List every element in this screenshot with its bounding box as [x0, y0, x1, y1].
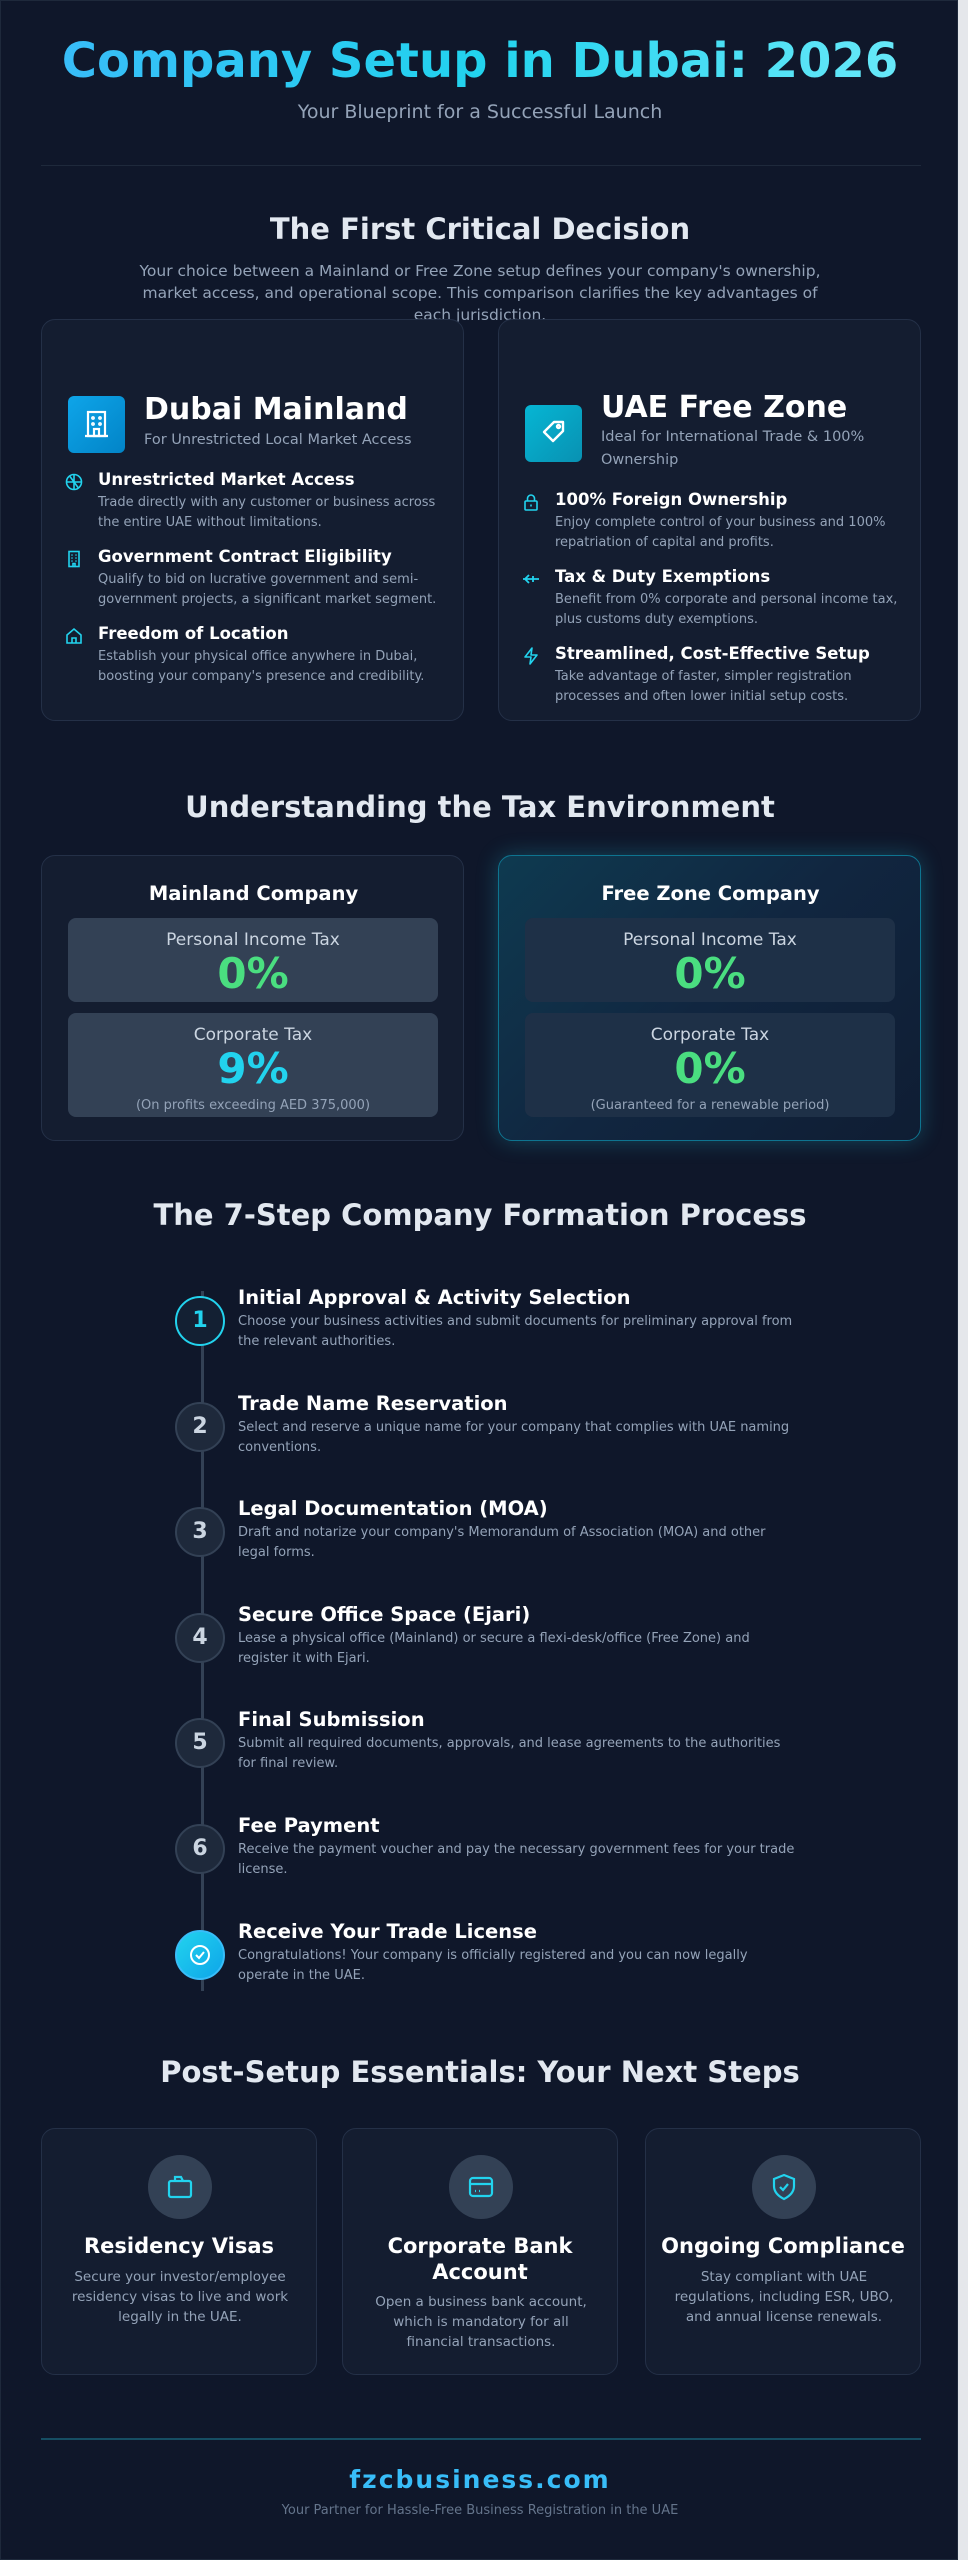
card: bank account: Account — [432, 2260, 528, 2284]
step 2: Select and reserve a unique name for your company that complies with UAE naming conventions. — [238, 1420, 789, 1455]
step 2 — [175, 1392, 789, 1455]
heading: post-setup: Post-Setup Essentials: Your Next Steps — [160, 2055, 800, 2089]
feature: ownership: 100% Foreign Ownership — [555, 490, 787, 509]
heading: UAE Free Zone — [601, 390, 847, 425]
step 6 — [175, 1814, 794, 1877]
card: compliance — [645, 2128, 921, 2375]
feature: government contracts: Government Contract Eligibility — [98, 547, 392, 566]
feature: freedom of location: Establish your physical office anywhere in Dubai, boosting your company's presence and credibility. — [98, 649, 424, 684]
icon: tag — [525, 405, 582, 462]
icon: card — [449, 2155, 513, 2219]
feature: ownership — [524, 490, 885, 550]
card: residency visas — [41, 2128, 317, 2375]
step 4: 4 — [192, 1625, 208, 1650]
corporate tax box: 0% — [674, 1044, 746, 1093]
step 2: Trade Name Reservation — [238, 1392, 508, 1415]
corporate tax box: Corporate Tax — [194, 1025, 312, 1045]
panel: Dubai Mainland — [41, 319, 464, 721]
feature: tax exemptions — [523, 567, 897, 627]
feature: market access: Unrestricted Market Access — [98, 470, 355, 489]
corporate tax box: (Guaranteed for a renewable period) — [591, 1098, 829, 1113]
panel: free zone tax — [498, 855, 921, 1141]
card: compliance: Ongoing Compliance — [661, 2234, 905, 2258]
step 1 — [175, 1286, 792, 1349]
feature: government contracts: Qualify to bid on lucrative government and semi-government projects, a significant market segment. — [98, 572, 436, 607]
subheading: For Unrestricted Local Market Access — [144, 432, 412, 448]
feature: tax exemptions: Tax & Duty Exemptions — [555, 567, 770, 586]
feature: government contracts — [68, 547, 436, 607]
icon: building — [68, 396, 125, 453]
step 7 — [175, 1920, 748, 1983]
card: residency visas: Secure your investor/employee residency visas to live and work legally in the UAE. — [72, 2269, 288, 2325]
card title: Free Zone Company — [601, 882, 820, 905]
step 1: Choose your business activities and submit documents for preliminary approval from the relevant authorities. — [238, 1314, 792, 1349]
step 5 — [175, 1708, 780, 1771]
personal income tax box: Personal Income Tax — [623, 930, 797, 950]
step 1: 1 — [192, 1308, 208, 1333]
feature: freedom of location: Freedom of Location — [98, 624, 288, 643]
card: bank account: Open a business bank account, which is mandatory for all financial transactions. — [375, 2294, 587, 2350]
heading: first critical decision: The First Critical Decision — [270, 212, 690, 246]
panel: mainland tax — [41, 855, 464, 1141]
step 3: Legal Documentation (MOA) — [238, 1497, 548, 1520]
footer brand: fzcbusiness.com — [349, 2465, 611, 2494]
panel: UAE Free Zone — [498, 319, 921, 721]
step 4: Secure Office Space (Ejari) — [238, 1603, 530, 1626]
feature: tax exemptions: Benefit from 0% corporate and personal income tax, plus customs duty exemptions. — [555, 592, 897, 627]
step 3: Draft and notarize your company's Memorandum of Association (MOA) and other legal forms. — [238, 1525, 766, 1560]
feature: freedom of location — [66, 624, 424, 684]
step 7: Receive Your Trade License — [238, 1920, 537, 1943]
step 7: Congratulations! Your company is officially registered and you can now legally operate in the UAE. — [238, 1948, 748, 1983]
step 5: Submit all required documents, approvals, and lease agreements to the authorities for final review. — [238, 1736, 780, 1771]
feature: ownership: Enjoy complete control of your business and 100% repatriation of capital and profits. — [555, 515, 885, 550]
step 4 — [175, 1603, 750, 1666]
step 1: Initial Approval & Activity Selection — [238, 1286, 631, 1309]
card: bank account — [342, 2128, 618, 2375]
feature: streamlined setup — [524, 644, 870, 704]
step 5: Final Submission — [238, 1708, 425, 1731]
footer tagline: Your Partner for Hassle-Free Business Registration in the UAE — [282, 2503, 678, 2518]
feature: streamlined setup: Streamlined, Cost-Effective Setup — [555, 644, 870, 663]
personal income tax box: 0% — [217, 949, 289, 998]
card: residency visas: Residency Visas — [84, 2234, 274, 2258]
feature: streamlined setup: Take advantage of faster, simpler registration processes and often lower initial setup costs. — [555, 669, 852, 704]
step 3: 3 — [192, 1519, 208, 1544]
personal income tax box: 0% — [674, 949, 746, 998]
corporate tax box — [68, 1013, 438, 1117]
step 6: Fee Payment — [238, 1814, 380, 1837]
step 6: 6 — [192, 1836, 208, 1861]
corporate tax box: Corporate Tax — [651, 1025, 769, 1045]
personal income tax box — [525, 918, 895, 1002]
feature: market access: Trade directly with any customer or business across the entire UAE without limitations. — [98, 495, 435, 530]
step 4: Lease a physical office (Mainland) or secure a flexi-desk/office (Free Zone) and register it with Ejari. — [238, 1631, 750, 1666]
icon: briefcase — [148, 2155, 212, 2219]
heading: tax environment: Understanding the Tax Environment — [185, 790, 775, 824]
step 6: Receive the payment voucher and pay the necessary government fees for your trade license. — [238, 1842, 794, 1877]
step 5: 5 — [192, 1730, 208, 1755]
subtitle: Your Blueprint for a Successful Launch — [298, 101, 662, 123]
card title: Mainland Company — [149, 882, 358, 905]
icon: shield — [752, 2155, 816, 2219]
card: compliance: Stay compliant with UAE regulations, including ESR, UBO, and annual license renewals. — [675, 2269, 893, 2325]
personal income tax box — [68, 918, 438, 1002]
step 2: 2 — [192, 1414, 208, 1439]
corporate tax box: 9% — [217, 1044, 289, 1093]
subheading: Ideal for International Trade & 100% Ownership — [601, 429, 864, 468]
corporate tax box: (On profits exceeding AED 375,000) — [136, 1098, 370, 1113]
step 3 — [175, 1497, 766, 1560]
heading: 7-step process: The 7-Step Company Formation Process — [153, 1198, 807, 1232]
corporate tax box — [525, 1013, 895, 1117]
heading: Dubai Mainland — [144, 392, 408, 427]
personal income tax box: Personal Income Tax — [166, 930, 340, 950]
feature: market access — [66, 470, 435, 530]
intro paragraph: Your choice between a Mainland or Free Zone setup defines your company's ownership, market access, and operational scope. This comparison clarifies the key advantages of each jurisdiction. — [139, 262, 821, 324]
timeline — [201, 1291, 204, 1991]
title: Company Setup in Dubai: 2026 — [62, 33, 898, 89]
card: bank account: Corporate Bank — [388, 2234, 572, 2258]
